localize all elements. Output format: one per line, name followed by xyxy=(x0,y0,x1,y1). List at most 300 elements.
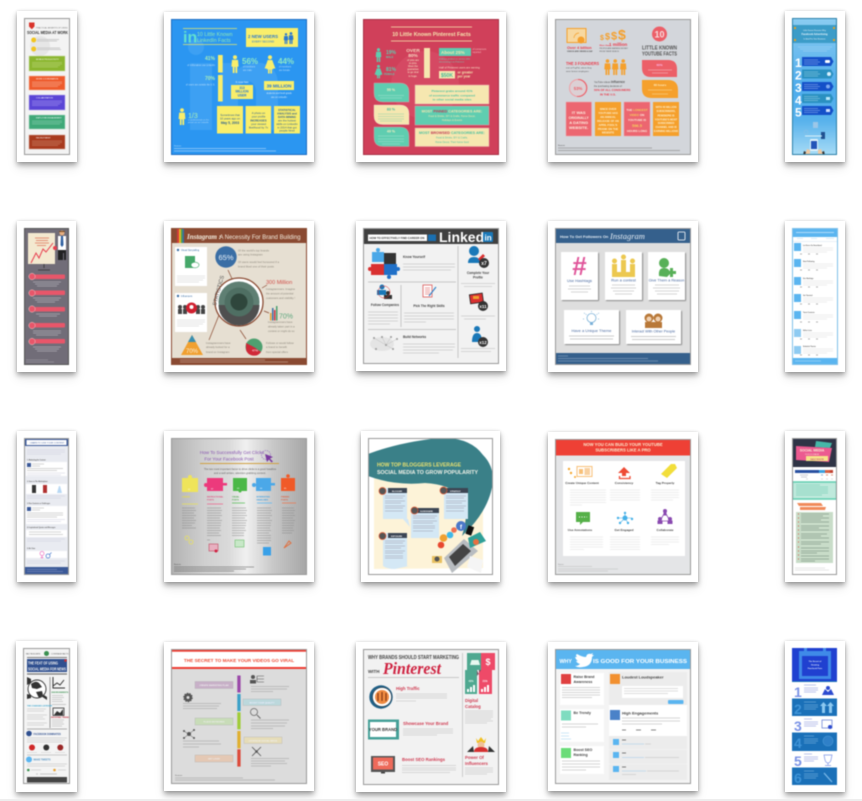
text: looked for a brand: Instagrammers have xyxy=(206,341,231,345)
item: use annotations: Use Annotations xyxy=(568,528,593,532)
thumbnail: videos go viral xyxy=(164,642,314,791)
footer xyxy=(27,777,67,782)
card: interact with other people: Interact With Other People xyxy=(632,330,675,334)
stat: 3 founders xyxy=(566,61,599,73)
icon: dollar signs: $ xyxy=(605,32,610,42)
title xyxy=(200,450,265,462)
panel: work coordination: WORK COORDINATION xyxy=(36,78,59,80)
title: 10 xyxy=(654,30,665,40)
text: top brands xyxy=(238,248,279,268)
sources: Sources: xyxy=(174,564,182,566)
chart: catalog tiles xyxy=(465,653,495,694)
icon: your brand frame: YOUR BRAND xyxy=(369,727,397,732)
bar 4 xyxy=(29,322,65,335)
step 2: 2 xyxy=(795,68,802,82)
card: dating website: IT WAS xyxy=(572,110,586,115)
thumbnail: Twitter for business xyxy=(548,642,698,791)
top strip: FACTBUILDERS xyxy=(26,652,41,656)
stat: influence: YouTube videos influence xyxy=(594,80,625,84)
card: raise brand awareness: Raise Brand xyxy=(574,675,594,679)
stat: 65%: 65% xyxy=(218,253,234,262)
header: SUBSCRIBERS LIKE A PRO xyxy=(595,448,651,452)
bubble: ghostwriter: SLIDESHARE xyxy=(420,510,434,513)
icon: profile x7: x7 xyxy=(481,261,487,267)
step 5: 5 xyxy=(795,106,802,120)
item: create unique content: Create Unique Content xyxy=(565,481,599,485)
stat: one third: planet are on LinkedIn xyxy=(188,121,209,124)
stat circles xyxy=(27,744,65,752)
stat: 300 million xyxy=(266,280,295,300)
stat: 1 million xyxy=(600,42,629,53)
section: complete your profile: Profile xyxy=(473,276,483,280)
panel: green tips xyxy=(796,512,833,563)
stat: about 25%: discovering it on Pinterest xyxy=(439,60,464,64)
stat: over 80%: to go viral xyxy=(408,71,419,74)
stat bullets xyxy=(31,38,61,52)
card: April fools: WEBSITE xyxy=(602,130,614,134)
stat: about 25% xyxy=(439,48,487,64)
header band xyxy=(793,25,836,43)
text: top brands: brand liked one of their posts xyxy=(238,264,275,268)
card: use hashtags: # xyxy=(572,251,587,281)
section: marketing content: 1. Marketing the Content xyxy=(27,458,46,462)
panel: high engagements: High Engagements xyxy=(622,710,659,716)
text: top brands: Of users would feel honoured if a xyxy=(238,260,279,264)
panel: 60 hours: 60 hours xyxy=(654,83,667,87)
infographic: marketing with Pinterest xyxy=(362,648,500,786)
panel: collaboration: COLLABORATION xyxy=(36,96,53,100)
column: pinning posts: PINNING xyxy=(281,496,290,498)
stat: 44% female: are female xyxy=(279,69,291,72)
icon: SEO monitor: SEO xyxy=(378,762,388,768)
column: visual content: VISUAL xyxy=(232,496,240,498)
panel: 41% traffic: of ecommerce traffic compared xyxy=(429,94,475,98)
infographic: why Twitter is good for business xyxy=(554,648,692,784)
tip 2: Start Following xyxy=(803,260,815,263)
column: interesting headlines: INTERESTING xyxy=(256,496,270,498)
page footer rule xyxy=(0,799,862,801)
header xyxy=(555,228,691,243)
title xyxy=(27,659,67,674)
header: in xyxy=(484,234,492,242)
tip 6: Utilize Lists xyxy=(803,329,812,332)
panel: most browsed: Food & Drinks, DIY & Crafts, xyxy=(436,136,468,140)
top strip: COVERAGE FACTS xyxy=(51,652,69,656)
title xyxy=(642,26,677,58)
infographic: Twitter tips feed xyxy=(791,227,839,366)
infographic: Instagram brand building xyxy=(170,227,308,366)
card: dating website: WEBSITE. xyxy=(569,125,588,130)
card: longest video: THE LONGEST xyxy=(626,108,648,112)
section: know yourself: Know Yourself xyxy=(403,255,426,259)
section: make tweets: MAKE TWEETS xyxy=(34,758,51,762)
header blob xyxy=(368,438,493,536)
stat: over 80%: OVER xyxy=(406,48,420,54)
stat: 1 million: 1 million xyxy=(609,42,628,47)
tip 4: Get Tweeted xyxy=(803,294,812,297)
stat: 41%: 41% xyxy=(205,56,216,62)
tip 5: Tweet Contests xyxy=(803,311,815,314)
chart: catalog tiles: 43% xyxy=(468,680,474,683)
title: WHY BRANDS SHOULD START MARKETING xyxy=(368,655,459,661)
stat: gender split: 81% xyxy=(386,67,397,73)
panel: most pinned: MOST PINNED CATEGORIES ARE: xyxy=(422,110,482,114)
title: YOUTUBE FACTS xyxy=(642,52,677,58)
rainbow rule xyxy=(200,463,279,464)
title: SOCIAL MEDIA TO GROW POPULARITY xyxy=(377,470,478,476)
orange ribbons xyxy=(797,503,826,510)
thumbnail: LinkedIn facts xyxy=(164,12,314,162)
icon: puzzle xyxy=(368,248,400,279)
callout text: are the hottest xyxy=(278,118,296,122)
item: tag properly: Tag Properly xyxy=(656,481,675,485)
stat: 44% female xyxy=(265,55,294,74)
stat: one third: of professionals on the xyxy=(188,118,210,122)
section: high traffic: High Traffic xyxy=(396,686,420,691)
callout text: likelihood by 7x xyxy=(249,126,269,130)
header xyxy=(792,228,838,242)
card: longest video: 596.5 xyxy=(632,123,643,128)
card: run a contest: Run a contest xyxy=(611,278,637,282)
stat: 70% contest xyxy=(268,306,295,333)
white panel xyxy=(563,461,685,556)
header: THE SECRET TO MAKE YOUR VIDEOS GO VIRAL xyxy=(184,658,294,663)
callout text: people hired xyxy=(279,128,295,132)
card: raise brand awareness xyxy=(560,673,604,705)
panel: employee engagement: EMPLOYEE ENGAGEMENT xyxy=(36,116,63,120)
icon: magnifier xyxy=(250,708,260,718)
header: 10 Little Known xyxy=(197,32,233,38)
header bar: Instagram : xyxy=(186,233,221,241)
tip 3: Use Hashtags xyxy=(803,277,814,280)
bar 2 xyxy=(29,290,65,302)
section: complete your profile xyxy=(461,271,495,286)
card: visual storytelling: Visual Storytelling xyxy=(181,249,200,252)
header xyxy=(183,28,237,46)
section: pick the right skills: Pick The Right Skills xyxy=(413,304,445,308)
card: longest video: HOURS LONG xyxy=(627,129,648,133)
stat: $50K: Half of Pinterest users are earning xyxy=(439,66,480,70)
thumbnail: followers on Instagram xyxy=(548,221,698,372)
header xyxy=(555,439,691,456)
sources: Sources: xyxy=(558,145,566,147)
puzzle piece blue: 04 xyxy=(260,488,263,490)
bar 3 xyxy=(29,306,65,316)
title: For Your Facebook Post xyxy=(204,456,254,462)
infographic: career on LinkedIn xyxy=(362,228,500,364)
thumbnail: YouTube facts xyxy=(548,12,698,162)
stat: 41% xyxy=(187,55,223,72)
icon: presenter xyxy=(250,675,264,684)
stat: $50K xyxy=(439,66,480,79)
stat: influence: 50% OF ALL CONSUMERS xyxy=(594,88,631,92)
section: contests: 3. Run Contests or Challenges xyxy=(27,502,50,505)
background cream xyxy=(374,470,483,569)
panel: regional trends: REGIONAL TRENDS xyxy=(51,716,70,719)
column: pinning posts: POSTS xyxy=(281,500,288,502)
card: April fools: AN ANNUAL xyxy=(600,115,616,119)
infographic: feat of using social media for news xyxy=(22,648,70,784)
icon: photo x11: x11 xyxy=(479,304,487,309)
stat: influence xyxy=(594,80,631,96)
thumbnail: Twitter tips xyxy=(785,221,845,372)
infographic: YouTube subscribers xyxy=(554,438,692,576)
puzzle piece green: 03 xyxy=(237,488,240,490)
puzzle piece pink: 02 xyxy=(211,488,214,490)
stat: 56% male: are male xyxy=(243,69,253,72)
watermark: in logo xyxy=(188,39,278,130)
header: TOOLS USAGE xyxy=(805,453,820,456)
stat: 300 million: Instagrammers. Imagine xyxy=(266,287,295,291)
thumbnail: Facebook advertising xyxy=(785,11,845,162)
header: DAILY ROUTE xyxy=(810,458,824,461)
stat: about 25%: About 25% xyxy=(441,50,465,55)
stat: 1 million: More than xyxy=(600,44,611,47)
stat: 300 million: 300 Million xyxy=(266,280,292,286)
panel: 49%: 49 % xyxy=(387,130,396,134)
subtitle: and a well written, attention grabbing content. xyxy=(214,471,266,475)
header: WHY xyxy=(560,659,572,665)
panel: replies xyxy=(609,736,687,780)
stat: 313 million users: MILLION xyxy=(235,90,249,94)
stat: 41%: of millionaires use LinkedIn xyxy=(187,64,216,67)
heading: PRACTICAL BENEFITS OF USING xyxy=(36,26,68,30)
step: place keywords: PLACE KEYWORDS xyxy=(204,720,225,724)
panel: 41% traffic xyxy=(415,85,489,104)
card: PewDiePie xyxy=(653,102,679,136)
title xyxy=(368,655,459,678)
stat: 70%: 70% xyxy=(205,76,216,82)
section: build networks: Build Networks xyxy=(403,335,426,339)
card: boost SEO ranking xyxy=(560,746,604,774)
chart: pie 47%: 47% xyxy=(252,348,258,352)
header xyxy=(792,438,837,467)
infographic: Facebook content guide xyxy=(24,438,70,576)
icon: network xyxy=(183,729,195,739)
card: PewDiePie: EARNING MILLIONS xyxy=(654,130,678,133)
infographic: followers on Instagram xyxy=(554,228,692,366)
header: IS GOOD FOR YOUR BUSINESS xyxy=(593,659,688,665)
panel: environments: ENVIRONMENTS xyxy=(52,692,69,694)
card: PewDiePie: SUBSCRIBERS, xyxy=(657,110,676,113)
stat: 56% male: of members xyxy=(243,66,256,68)
stat: 70% contest: contest or might do so xyxy=(268,329,295,333)
column: visual content: POSTS xyxy=(232,500,239,502)
card: have a unique theme: Have a Unique Theme xyxy=(572,328,612,333)
bubble: blogger: BLOGGER xyxy=(392,491,403,493)
card: use hashtags xyxy=(561,251,598,300)
step 4: 4 xyxy=(795,94,802,108)
callout text: May 5, 2003 xyxy=(221,121,239,125)
stat: 300 million: customers and visibility ! xyxy=(266,296,295,300)
section: boost SEO rankings: Boost SEO Rankings xyxy=(402,757,446,762)
header calendar: Facebook Fans xyxy=(808,668,823,670)
header: in xyxy=(183,30,197,46)
section: be human with gender icons: 5. Be Clear xyxy=(27,548,36,550)
callout text: DATA MINING xyxy=(278,115,296,119)
infographic: get clicks for Facebook post xyxy=(170,438,308,576)
stat: 4 billion xyxy=(567,45,593,53)
header bar: A Necessity For Brand Building xyxy=(220,235,300,241)
section: complete your profile: Complete Your xyxy=(467,271,490,275)
icon: gear xyxy=(184,694,192,702)
header band: Little Known Reasons Why xyxy=(803,29,826,32)
panel: most browsed: MOST BROWSED CATEGORIES ARE: xyxy=(419,131,485,135)
callout text: your profile xyxy=(252,114,266,118)
stat: 300 million: the amount of potential xyxy=(266,292,294,296)
panel: the changed listener: THE CHANGED LISTENER xyxy=(27,704,53,708)
header: SOCIAL MEDIA xyxy=(800,448,825,452)
step: don't ignore quality: BOOST YOUR QUALITY xyxy=(250,702,275,704)
stat: influence: the purchasing decisions of xyxy=(594,85,622,88)
stat: 1 million: PEOPLE ARE EARNING MONEY xyxy=(600,47,629,50)
card: April fools: APRIL FOOL'S xyxy=(599,123,618,127)
callout: 2 new users: 2 NEW USERS xyxy=(248,34,279,40)
stat: 70% contest: Instagrammers have xyxy=(268,320,293,324)
card: boost SEO ranking: Ranking xyxy=(574,753,588,757)
infographic: social media at work xyxy=(24,18,70,156)
thumbnail: social media at work xyxy=(17,11,77,162)
connector lines xyxy=(209,270,269,340)
stat: about 25%: of consumers xyxy=(472,48,487,51)
footer xyxy=(792,358,838,365)
icon: high traffic circle xyxy=(369,685,393,709)
column: instructional posts: POSTS xyxy=(207,500,214,502)
bar 5 xyxy=(29,338,65,351)
stat: $50K: $50K xyxy=(441,73,453,79)
panel: recruitment: RECRUITMENT xyxy=(36,138,51,140)
stat: 3 founders: met at PayPal, where they xyxy=(566,66,592,70)
infographic: secret to viral videos xyxy=(170,648,308,784)
stat: 70% contest: already taken part in a xyxy=(268,324,295,328)
chart: 53% ring: 53% xyxy=(574,86,582,91)
icon: dollar signs: $ xyxy=(618,26,626,42)
callout text xyxy=(220,108,298,132)
text: top brands: Of the world's top brands xyxy=(238,248,270,252)
bar 1 xyxy=(29,273,65,286)
callout text: Sometimes that xyxy=(220,113,240,117)
step 2: 2 xyxy=(794,701,802,717)
card: give them a reason: Give Them a Reason xyxy=(649,278,684,282)
text: looked for a brand xyxy=(206,341,231,354)
section: power of influencers: Power Of xyxy=(465,755,484,760)
infographic: growing Facebook fans xyxy=(791,647,838,786)
footer xyxy=(24,567,69,575)
stat: one third xyxy=(179,108,210,125)
stat: 313 million users: USER xyxy=(238,94,247,98)
stat: 44% female: 44% xyxy=(278,57,294,66)
header xyxy=(363,228,499,245)
section: digital catalog: Catalog xyxy=(465,704,481,709)
timeline xyxy=(237,676,241,767)
callout text: skills on LinkedIn xyxy=(276,122,298,126)
top strip xyxy=(26,651,69,658)
item: consistency: Consistency xyxy=(615,481,633,485)
stat: gender split xyxy=(374,48,397,78)
icon: screen and hand xyxy=(567,28,586,44)
footer xyxy=(555,353,691,365)
header: How To Get Followers On xyxy=(560,234,609,239)
stat: 39 million xyxy=(264,81,294,99)
stat: 70% contest: 70% xyxy=(279,314,293,320)
thumbnail: Pinterest facts xyxy=(356,12,506,162)
callout: 2 new users xyxy=(246,28,298,47)
panel: 60%: 60% xyxy=(656,63,663,67)
stat: 39 million: 39 MILLION xyxy=(267,84,291,88)
thumbnail: business success xyxy=(17,221,76,372)
card: dating website: ORIGINALLY xyxy=(569,116,590,120)
bubble: experience: EXPOSURE xyxy=(391,536,403,538)
panel: most browsed: Home Decor, Their home food xyxy=(435,141,469,144)
infographic: 10 little known Pinterest facts xyxy=(362,18,500,156)
stat: over 80%: re-pins. xyxy=(409,62,417,65)
card: use hashtags: Use Hashtags xyxy=(567,278,592,283)
infographic: bloggers leverage social media xyxy=(368,438,494,576)
header: HOW TO EFFECTIVELY FIND CAREER ON xyxy=(370,236,424,240)
header: LinkedIn Facts xyxy=(197,38,231,44)
card: April fools: YOUTUBE HAS xyxy=(598,111,618,115)
stat: one third: 1/3 xyxy=(188,113,198,120)
card: April fools: SINCE OVER xyxy=(600,107,616,111)
card: influencers: Influencers xyxy=(181,295,193,298)
callout text: 10 years ago on xyxy=(220,116,240,120)
chart: central statistics dial: STATISTICS xyxy=(212,275,226,307)
thumbnail: marketing with Pinterest xyxy=(356,642,506,792)
stat: 4 billion: Over 4 billion xyxy=(567,45,592,50)
stat: over 80% xyxy=(406,48,420,78)
stat: 313 million users: 313 xyxy=(239,86,245,90)
callout text: INCREASES xyxy=(250,118,267,122)
header: Instagram xyxy=(609,231,645,241)
step 3: 3 xyxy=(795,81,802,95)
thumbnail: growing Facebook fans xyxy=(785,641,845,792)
thumbnail: top bloggers xyxy=(361,431,500,582)
card: PewDiePie: WITH 40 MILLION xyxy=(656,106,677,109)
stat: influence: IN THE U.S. xyxy=(600,92,616,96)
stat: 313 million users: It now has xyxy=(236,80,249,84)
section: showcase your brand: Showcase Your Brand xyxy=(403,721,449,726)
bubble: strategist: STRATEGY xyxy=(450,490,461,493)
icon: social bubbles: f xyxy=(460,524,463,531)
header search bar: LEARN TO LIKE YOUR CONTENT xyxy=(30,442,65,444)
icon: dollar signs: $ xyxy=(611,30,617,42)
icon: three founders xyxy=(604,59,626,75)
stat: 56% male xyxy=(231,55,258,73)
card: April fools: RELEASE OF AN xyxy=(597,119,619,123)
stat: gender split: 19% xyxy=(386,50,397,56)
header: Linked xyxy=(439,229,484,245)
panel: 55%: 55 % xyxy=(387,88,396,92)
subtitle xyxy=(204,467,277,475)
card: PewDiePie: SUBSCRIBED xyxy=(658,122,674,125)
text: special offers: a brand to benefit xyxy=(266,345,287,349)
title xyxy=(377,462,478,476)
stat: about 25%: reported xyxy=(472,51,482,54)
stat: over 80%: of pins are xyxy=(407,59,419,62)
callout: 2 new users: EVERY SECOND xyxy=(252,40,274,44)
header: NOW YOU CAN BUILD YOUR YOUTUBE xyxy=(583,442,663,447)
stat: 56% male: 56% xyxy=(242,57,258,66)
step: get loud: GET LOUD! xyxy=(208,758,220,760)
icon: crossed arrows xyxy=(252,747,261,756)
icon: network map xyxy=(370,336,398,351)
step: leverage social media: LEVERAGE SOCIAL MEDIA xyxy=(249,740,278,742)
card: dating website xyxy=(566,102,592,136)
card: PewDiePie: CHANNEL AND IS xyxy=(655,126,677,129)
thumbnail: find career on LinkedIn xyxy=(356,221,506,371)
section: power of influencers xyxy=(465,755,493,774)
card: longest video: YOUTUBE IS xyxy=(628,118,646,122)
